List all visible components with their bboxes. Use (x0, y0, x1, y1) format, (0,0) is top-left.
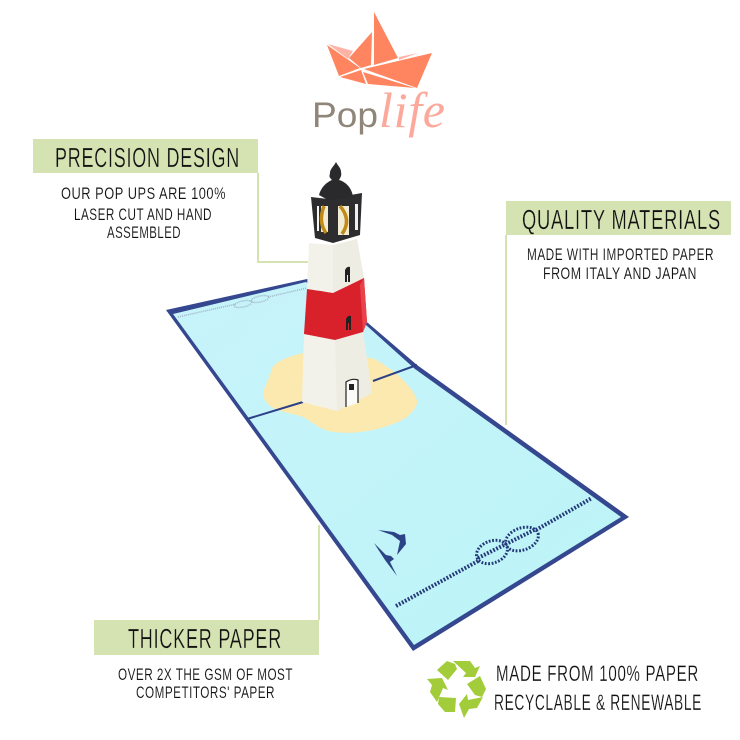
panel: quality materials (506, 201, 731, 283)
icon: recycle arrows (427, 661, 486, 718)
panel: recyclable (427, 661, 702, 718)
icon: origami paper boat (327, 12, 432, 88)
description (118, 665, 293, 702)
island (263, 353, 417, 433)
connector lines (258, 173, 506, 620)
card inner panel (173, 282, 621, 645)
description (61, 184, 226, 242)
recycle text (494, 661, 702, 715)
description (527, 245, 714, 283)
lighthouse (302, 162, 372, 411)
description: OUR POP UPS ARE 100% (61, 184, 226, 203)
wordmark (312, 82, 445, 138)
tower windows (345, 267, 351, 330)
door (346, 379, 358, 407)
dome (319, 162, 353, 200)
card base (166, 279, 629, 651)
description: COMPETITORS' PAPER (136, 683, 275, 702)
heading: THICKER PAPER (128, 623, 282, 654)
upper knot rope (178, 288, 307, 317)
description: LASER CUT AND HAND (74, 205, 212, 224)
heading: PRECISION DESIGN (55, 142, 240, 173)
wordmark: life (379, 82, 445, 138)
fold lines (247, 365, 417, 419)
wordmark: Pop (312, 96, 378, 135)
panel: precision design (33, 139, 258, 242)
panel: thicker paper (94, 620, 319, 702)
icon: two birds (374, 530, 406, 576)
open pop-up card (166, 162, 629, 651)
lantern room (311, 193, 362, 243)
tower upper white section (307, 239, 364, 293)
logo: Poplife (312, 12, 445, 138)
red band (304, 278, 367, 340)
description: ASSEMBLED (107, 223, 181, 242)
heading band (33, 139, 258, 173)
lower knot rope (396, 498, 592, 606)
heading band (506, 201, 731, 235)
heading band (94, 620, 319, 655)
tower lower white section (302, 332, 372, 411)
description: OVER 2X THE GSM OF MOST (118, 665, 293, 684)
